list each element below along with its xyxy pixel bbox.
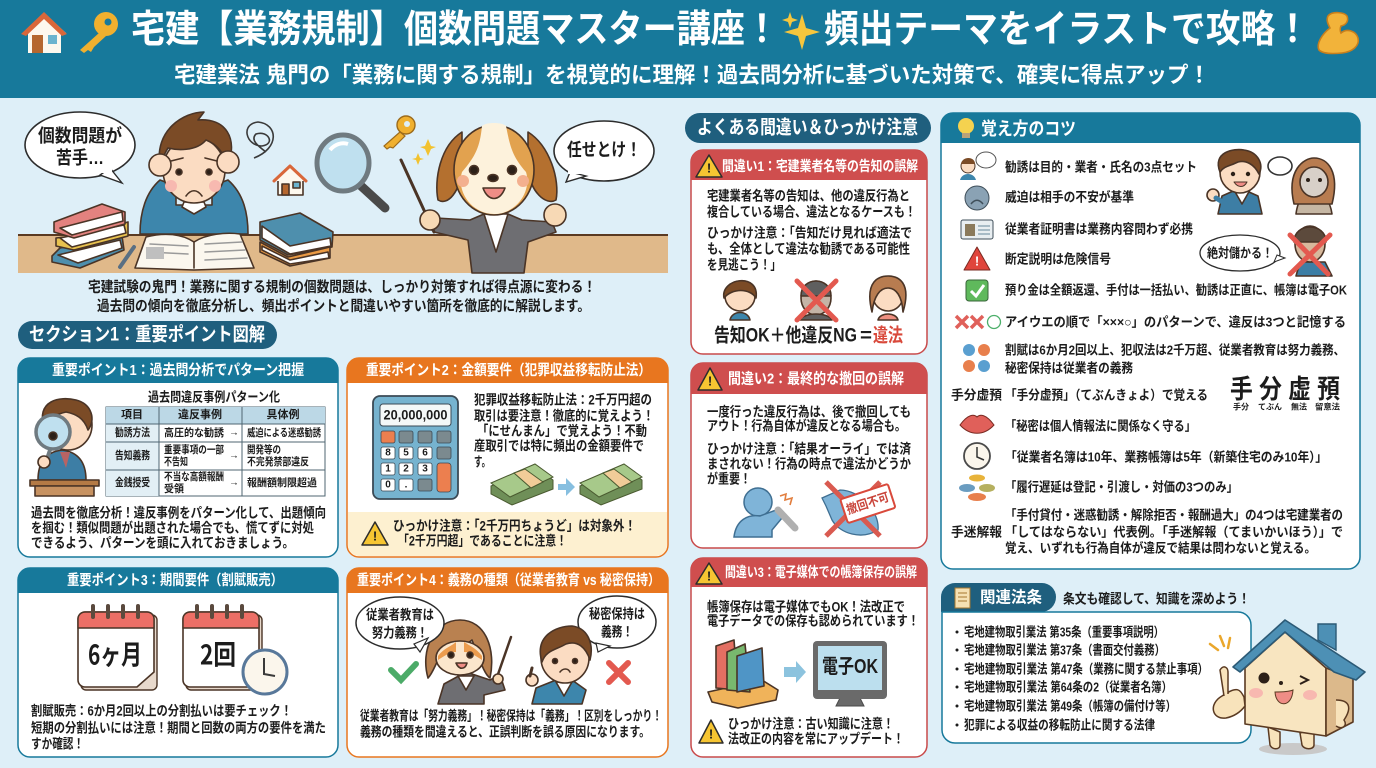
- panel: related laws: [942, 612, 1251, 743]
- faces: [724, 276, 906, 320]
- speech bubble left: 努力義務！: [372, 624, 428, 640]
- section heading: related laws: 関連法条: [980, 588, 1042, 606]
- calculator: [373, 396, 458, 499]
- small house icon: [274, 166, 306, 195]
- violation pattern table: 金銭授受: [115, 475, 150, 489]
- body text: 犯罪収益移転防止法：2千万円超の: [474, 392, 652, 408]
- icon: confusion swirl: [247, 122, 273, 158]
- icon: warning: [696, 155, 722, 177]
- speech bubble: 個数問題が苦手: 個数問題が: [38, 125, 122, 146]
- section heading pill: セクション1：重要ポイント図解: [29, 322, 265, 346]
- speech bubble: 任せとけ: [554, 121, 654, 182]
- panel: memory tips: [941, 113, 1360, 569]
- panel: related laws: 宅地建物取引業法 第37条（書面交付義務）: [964, 642, 1165, 658]
- mnemonic: 手分虚預: 手 分 虚 預: [1230, 374, 1340, 404]
- body text: も、全体として違法な勧誘である可能性: [707, 240, 910, 256]
- speech bubble: 絶対儲かる: 絶対儲かる！: [1207, 246, 1273, 260]
- icon: house: [21, 12, 67, 53]
- panel: related laws: 宅地建物取引業法 第47条（業務に関する禁止事項）: [964, 662, 1208, 676]
- icon: monitor: 電子OK: [822, 656, 878, 678]
- calendar: 2回 with clock: 2回: [200, 634, 236, 672]
- body text: 「にせんまん」で覚えよう！不動: [477, 422, 647, 438]
- heading: 覚え方のコツ: [981, 118, 1076, 139]
- illustration: student with magnifier: [30, 399, 99, 496]
- icon: four discs: [963, 344, 990, 372]
- icon: books: [708, 640, 778, 708]
- panel: related laws: 宅地建物取引業法 第64条の2（従業者名簿）: [964, 680, 1172, 694]
- heading: 重要ポイント1：過去問分析でパターン把握: [52, 361, 304, 379]
- student pointing finger: [526, 626, 591, 704]
- mnemonic: 手分虚預: てぶん: [1258, 402, 1282, 412]
- calculator: 8: [385, 448, 391, 458]
- body text: [31, 702, 326, 752]
- body text: 従業者教育は「努力義務」！秘密保持は「義務」！区別をしっかり！: [360, 708, 662, 724]
- stack of books right: [260, 213, 333, 266]
- violation pattern table: 具体例: [266, 407, 300, 421]
- trap warning band: ひっかけ注意：「2千万円ちょうど」は対象外！: [393, 518, 636, 534]
- icon: flexed arm: [1318, 13, 1358, 54]
- speech bubble: 任せとけ: 任せとけ！: [567, 140, 641, 160]
- violation pattern table: 報酬額制限超過: [247, 476, 317, 489]
- icon: cross: [609, 663, 628, 682]
- violation pattern table: →: [229, 428, 239, 438]
- calculator: .: [405, 480, 408, 490]
- worried student: [140, 112, 248, 234]
- violation pattern table: 勧誘方法: [115, 425, 150, 439]
- icon: check: [391, 664, 416, 680]
- calculator: 0: [385, 480, 391, 490]
- icon: warning: [696, 563, 722, 584]
- violation pattern table: 威迫による迷惑勧誘: [247, 426, 321, 439]
- icon: sparkles: [782, 12, 820, 50]
- tip text: [951, 160, 1348, 556]
- calendar: 6ヶ月: [78, 606, 157, 690]
- icon: monitor: [813, 641, 887, 706]
- panel: mistake 2: [691, 363, 927, 548]
- violation pattern table: 受領: [164, 482, 184, 495]
- panel: related laws: 宅地建物取引業法 第49条（帳簿の備付け等）: [964, 698, 1176, 714]
- body text: [707, 404, 911, 486]
- trap warning band: 「2千万円超」であることに注意！: [398, 532, 567, 548]
- tip text: 勧誘は目的・業者・氏名の3点セット: [1005, 160, 1197, 174]
- icon: ID card: [961, 220, 993, 239]
- icon: cross cross circle: [956, 316, 1000, 328]
- icon: light bulb: [958, 118, 974, 138]
- body text: す。: [474, 454, 490, 470]
- trap warning: ひっかけ注意：古い知識に注意！: [728, 716, 894, 732]
- illustration: person and retraction stamp: [734, 482, 895, 537]
- calculator: 1: [385, 464, 391, 474]
- section heading: common mistakes: よくある間違い＆ひっかけ注意: [697, 116, 918, 138]
- body text: すか確認！: [31, 736, 84, 752]
- tip text: 威迫は相手の不安が基準: [1005, 190, 1134, 204]
- panel: point 2: [347, 358, 668, 557]
- tip text: 「秘密は個人情報法に関係なく守る」: [1005, 418, 1196, 434]
- intro text: 宅建試験の鬼門！業務に関する規制の個数問題は、しっかり対策すれば得点源に変わる！: [88, 278, 596, 296]
- body text: [707, 188, 916, 272]
- calculator: 6: [422, 448, 428, 458]
- violation pattern table: [106, 407, 325, 496]
- body text: 取引は要注意！徹底的に覚えよう！: [474, 408, 654, 424]
- formula: 違法: [873, 324, 903, 346]
- illustration: person and retraction stamp: 撤回不可: [844, 489, 891, 517]
- tip text: 「履行遅延は登記・引渡し・対価の3つのみ」: [1005, 480, 1238, 494]
- calculator: 5: [403, 448, 409, 458]
- heading: 間違い2：最終的な撤回の誤解: [728, 370, 904, 388]
- heading: 重要ポイント4：義務の種類（従業者教育 vs 秘密保持）: [357, 571, 660, 589]
- tip text: アイウエの順で「×××○」のパターンで、違反は3つと記憶する: [1005, 314, 1346, 330]
- icon: warning: !: [707, 160, 711, 176]
- violation pattern table: →: [229, 450, 239, 462]
- trap warning: [699, 716, 904, 746]
- section heading pill: [18, 321, 277, 349]
- section heading: common mistakes: [685, 113, 931, 143]
- icon: coloured weights: [959, 474, 995, 501]
- trap warning: !: [709, 726, 713, 742]
- heading: 重要ポイント2：金額要件（犯罪収益移転防止法）: [366, 361, 651, 379]
- tip text: 「従業者名簿は10年、業務帳簿は5年（新築住宅のみ10年）」: [1005, 450, 1327, 464]
- open book: [135, 233, 254, 270]
- title: 頻出テーマをイラストで攻略！: [824, 9, 1310, 51]
- body text: が重要！: [707, 470, 751, 486]
- body text: まされない！行為の時点で違法かどうか: [707, 456, 911, 472]
- panel: mistake 3: [691, 558, 927, 757]
- body text: 割賦販売：6か月2回以上の分割払いは要チェック！: [31, 702, 292, 718]
- intro text: [88, 278, 596, 315]
- icon: clock: [964, 443, 990, 469]
- section heading: related laws: [941, 583, 1056, 612]
- body text: ひっかけ注意：「結果オーライ」では済: [707, 440, 911, 456]
- related-law note: 条文も確認して、知識を深めよう！: [1063, 590, 1250, 606]
- icon: key: [80, 12, 118, 53]
- body text: [360, 708, 662, 740]
- speech bubble right: 秘密保持は: [589, 606, 645, 622]
- body text: ひっかけ注意：「告知だけ見れば適法で: [707, 224, 912, 240]
- speech bubble: 絶対儲かる: [1200, 235, 1285, 271]
- icon: lips: [960, 415, 994, 433]
- dog teacher: [401, 123, 566, 273]
- title: [131, 9, 1310, 51]
- trap warning band: !: [373, 528, 377, 544]
- body text: を掴む！類似問題が出題された場合でも、慌てずに対処: [31, 520, 314, 536]
- body text: アウト！行為自体が違反となる場合も。: [707, 418, 906, 434]
- panel: related laws: 犯罪による収益の移転防止に関する法律: [964, 718, 1155, 732]
- body text: 帳簿保存は電子媒体でもOK！法改正で: [707, 598, 905, 614]
- mnemonic: 手分虚預: 手分: [1233, 402, 1249, 412]
- speech bubble left: [356, 597, 444, 652]
- body text: 電子データでの保存も認められています！: [707, 612, 919, 628]
- violation pattern table: →: [229, 478, 239, 488]
- body text: を見逃こう！」: [707, 256, 781, 272]
- body text: できるよう、パターンを頭に入れておきましょう。: [31, 536, 294, 550]
- tip icons: [956, 152, 1000, 501]
- header banner: [0, 0, 1376, 98]
- speech bubble: 個数問題が苦手: 苦手…: [56, 148, 104, 168]
- hero illustration: [18, 112, 668, 273]
- body text: 宅建業者名等の告知は、他の違反行為と: [707, 188, 910, 204]
- heading: 重要ポイント3：期間要件（割賦販売）: [67, 572, 283, 589]
- violation pattern table: 告知義務: [115, 448, 150, 462]
- crossed-out salesman: [1290, 226, 1332, 276]
- violation pattern table: 違反事例: [178, 407, 222, 421]
- speech bubble right: [578, 596, 656, 652]
- icon: man with thought: [960, 152, 996, 180]
- icon: check box: [966, 280, 988, 301]
- body text: 産取引では特に頻出の金額要件で: [474, 438, 644, 454]
- table heading: 過去問違反事例パターン化: [148, 390, 280, 404]
- icon: cash stacks with arrow: [491, 464, 642, 505]
- formula: 告知OK＋他違反NG: [714, 324, 857, 346]
- icon: alert triangle: !: [975, 254, 979, 268]
- teacher dog with pointer: [426, 620, 511, 704]
- heading: 間違い3：電子媒体での帳簿保存の誤解: [725, 564, 917, 580]
- speech bubble right: 義務！: [601, 624, 633, 640]
- pen: [120, 247, 134, 267]
- icon: warning: !: [707, 568, 711, 584]
- tip text: 「してはならない」代表例。「手迷解報（てまいかいほう）」で: [1005, 524, 1343, 540]
- calculator: 20,000,000: [384, 408, 448, 422]
- trap warning band: [348, 512, 667, 556]
- title: 宅建【業務規制】個数問題マスター講座！: [131, 9, 779, 51]
- desk: [18, 234, 668, 273]
- body text: 義務の種類を間違えると、正誤判断を誤る原因になります。: [360, 724, 650, 740]
- mnemonic: 手分虚預: 留意法: [1315, 402, 1340, 412]
- arrow: [784, 661, 806, 683]
- calendar: 6ヶ月: 6ヶ月: [88, 634, 142, 672]
- tip text: 手迷解報: [951, 524, 1002, 540]
- panel: mistake 1: [691, 150, 927, 354]
- stack of books left: [52, 204, 128, 268]
- mnemonic: 手分虚預: 無法: [1291, 402, 1307, 412]
- golden key: [384, 116, 415, 149]
- violation pattern table: 不告知: [164, 455, 188, 468]
- house mascot: [1210, 620, 1365, 755]
- icon: alert triangle: [964, 247, 990, 270]
- tip text: 「手分虚預」（てぶんきょよ）で覚える: [1005, 388, 1208, 402]
- calendar: 2回 with clock: [183, 606, 287, 694]
- sparkles: [412, 139, 436, 165]
- speech bubble: 個数問題が苦手: [25, 112, 135, 183]
- icon: worried face: [965, 186, 989, 210]
- body text: 過去問を徹底分析！違反事例をパターン化して、出題傾向: [31, 504, 326, 520]
- tip text: 手分虚預: [951, 388, 1002, 402]
- trap warning: 法改正の内容を常にアップデート！: [728, 730, 904, 746]
- violation pattern table: 高圧的な勧誘: [164, 426, 224, 439]
- illustration: salesman and worried woman: [1207, 150, 1335, 214]
- body text: 複合している場合、違法となるケースも！: [707, 204, 916, 220]
- formula: =: [860, 326, 872, 346]
- panel: related laws: 宅地建物取引業法 第35条（重要事項説明）: [964, 624, 1164, 640]
- violation pattern table: 不完発禁部違反: [247, 455, 309, 468]
- intro text: 過去問の傾向を徹底分析し、頻出ポイントと間違いやすい箇所を徹底的に解説します。: [97, 297, 590, 315]
- body text: [707, 598, 919, 628]
- calculator: 2: [403, 464, 409, 474]
- icon: scroll: [955, 588, 970, 608]
- tip text: 秘密保持は従業者の義務: [1005, 360, 1133, 376]
- tip text: 覚え、いずれも行為自体が違反で結果は問わないと覚える。: [1005, 540, 1316, 556]
- body text: 一度行った違反行為は、後で撤回しても: [707, 404, 911, 420]
- violation pattern table: 不当な高額報酬: [164, 470, 224, 483]
- icon: warning: [698, 368, 722, 390]
- tip text: 断定説明は危険信号: [1005, 252, 1111, 266]
- subtitle: 宅建業法 鬼門の「業務に関する規制」を視覚的に理解！過去問分析に基づいた対策で、確実に得点アップ！: [174, 62, 1210, 88]
- violation pattern table: 開発等の: [247, 443, 281, 456]
- magnifying glass: [317, 135, 385, 208]
- body text: [31, 504, 326, 550]
- violation pattern table: 重要事項の一部: [164, 443, 224, 456]
- tip text: 従業者証明書は業務内容問わず必携: [1005, 222, 1193, 236]
- heading: 間違い1：宅建業者名等の告知の誤解: [722, 158, 918, 174]
- panel: point 3: [18, 568, 338, 757]
- speech bubble left: 従業者教育は: [366, 606, 434, 622]
- violation pattern table: 項目: [121, 408, 143, 421]
- body text: [474, 392, 654, 470]
- panel: point 4: [347, 568, 668, 757]
- calculator: 3: [422, 464, 428, 474]
- icon: warning: !: [708, 374, 712, 388]
- panel: point 1: [18, 358, 338, 557]
- body text: 短期の分割払いには注意！期間と回数の両方の要件を満た: [31, 720, 326, 736]
